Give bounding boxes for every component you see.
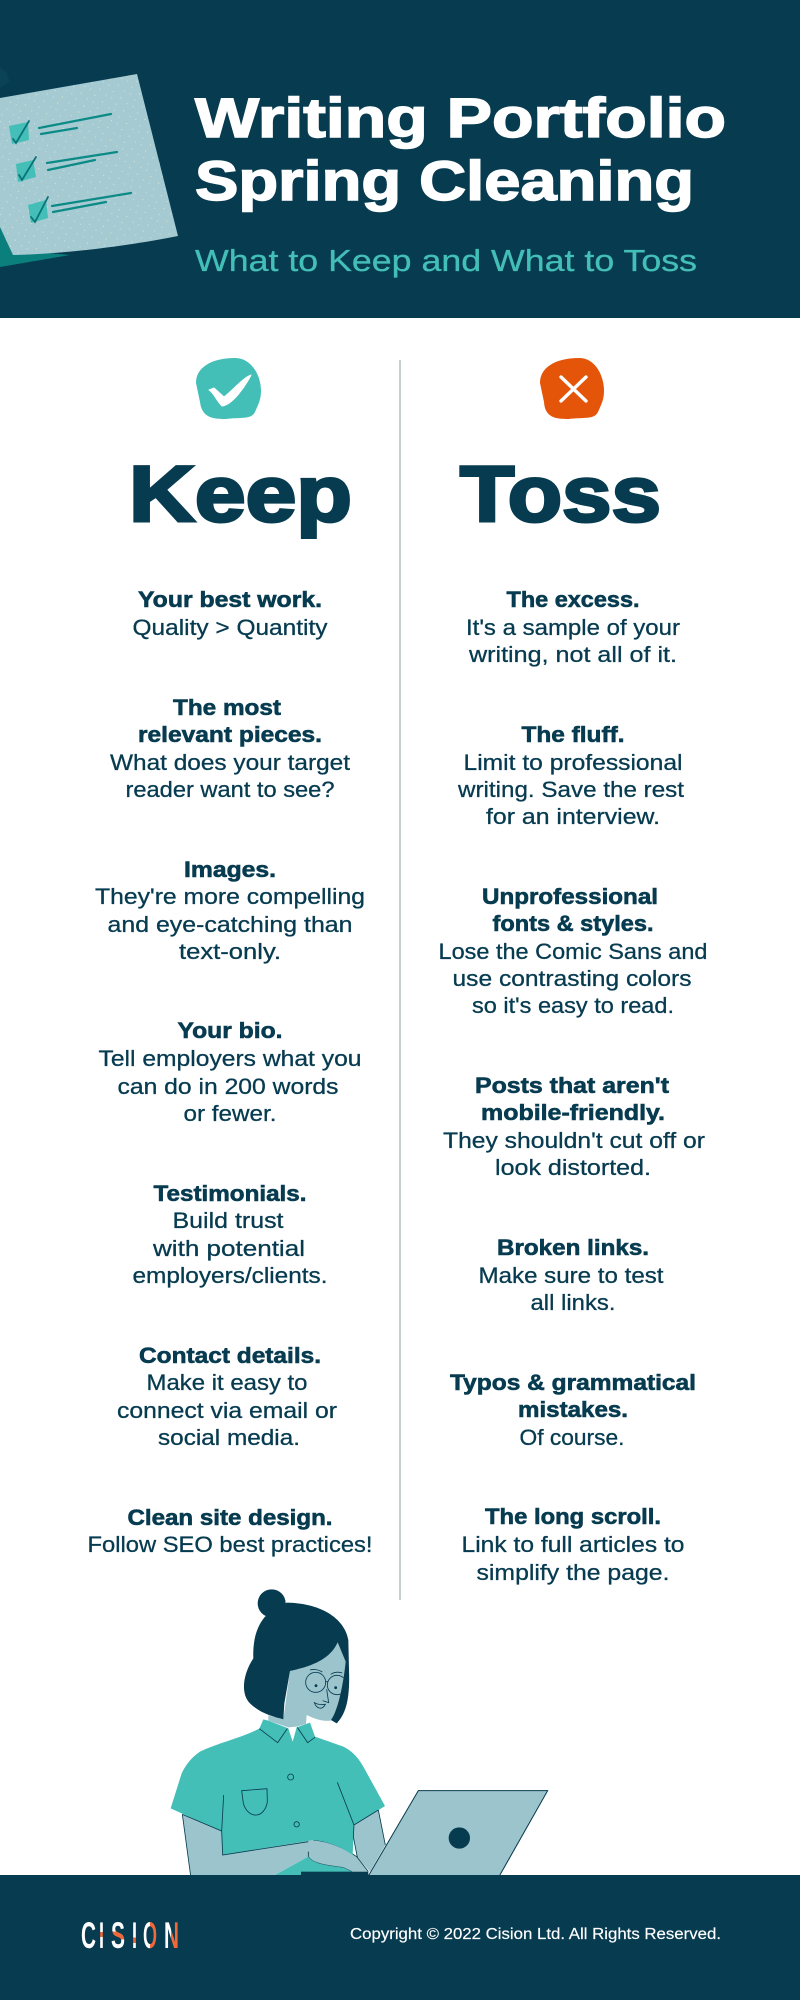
keep item: relevant pieces: The most	[173, 695, 282, 720]
logo: N	[164, 1915, 179, 1956]
keep item: testimonials	[132, 1181, 328, 1288]
logo: I	[99, 1915, 104, 1956]
keep item: site design: Follow SEO best practices!	[88, 1532, 372, 1557]
keep item: contact details: Make it easy to	[146, 1370, 308, 1395]
keep item: bio	[98, 1018, 362, 1126]
keep item: images: text-only.	[179, 939, 281, 964]
keep item: testimonials: Build trust	[172, 1208, 284, 1233]
toss item: typos: mistakes.	[518, 1397, 628, 1422]
toss item: excess: The excess.	[506, 587, 640, 612]
keep item: images: and eye-catching than	[108, 912, 352, 937]
keep item: bio: Tell employers what you	[98, 1046, 362, 1071]
toss item: fluff: The fluff.	[522, 722, 624, 747]
toss item: typos: Of course.	[520, 1425, 624, 1450]
toss item: long scroll: The long scroll.	[485, 1504, 661, 1529]
header banner	[0, 0, 800, 318]
toss item: excess: writing, not all of it.	[468, 642, 677, 667]
toss item: fonts and styles: Unprofessional	[482, 884, 658, 909]
keep item: contact details	[117, 1343, 337, 1450]
heading: Toss: Toss	[460, 449, 661, 538]
keep item: testimonials: Testimonials.	[154, 1181, 306, 1206]
toss item: fluff: writing. Save the rest	[457, 777, 684, 802]
keep item: testimonials: with potential	[152, 1236, 305, 1261]
collar and shirt seams	[259, 1727, 315, 1743]
keep item: images	[95, 857, 365, 964]
keep item: bio: can do in 200 words	[118, 1074, 338, 1099]
toss item: mobile friendly	[443, 1073, 705, 1180]
toss item: fonts and styles: so it's easy to read.	[472, 993, 674, 1018]
title: Writing Portfolio	[195, 86, 726, 149]
face details	[182, 1669, 378, 1857]
keep item: contact details: Contact details.	[139, 1343, 321, 1368]
toss item: typos: Typos & grammatical	[450, 1370, 696, 1395]
toss item: mobile friendly: They shouldn't cut off or	[443, 1128, 705, 1153]
toss item: fonts and styles	[438, 884, 708, 1018]
toss item: long scroll: simplify the page.	[476, 1560, 670, 1585]
toss item: excess: It's a sample of your	[466, 615, 680, 640]
logo: S	[111, 1915, 125, 1956]
laptop	[301, 1791, 548, 1877]
title: Spring Cleaning	[195, 149, 694, 212]
keep item: relevant pieces: reader want to see?	[126, 777, 334, 802]
keep item: bio: or fewer.	[184, 1101, 276, 1126]
icon: checklist paper	[0, 67, 178, 267]
title	[195, 86, 726, 212]
keep item: relevant pieces	[110, 695, 350, 802]
toss item: broken links: all links.	[530, 1290, 616, 1315]
arms	[182, 1810, 385, 1876]
logo	[81, 1915, 179, 1956]
toss item: long scroll	[462, 1504, 684, 1585]
keep item: site design: Clean site design.	[128, 1505, 332, 1530]
hair	[244, 1589, 349, 1723]
keep item: best work	[132, 587, 328, 640]
subtitle: What to Keep and What to Toss	[195, 243, 697, 278]
toss item: fluff: Limit to professional	[464, 750, 682, 775]
keep item: relevant pieces: What does your target	[110, 750, 350, 775]
heading: Keep: Keep	[129, 449, 352, 538]
toss item: fonts and styles: use contrasting colors	[452, 966, 692, 991]
toss item: typos	[450, 1370, 696, 1450]
toss item: mobile friendly: Posts that aren't	[475, 1073, 670, 1098]
keep item: contact details: social media.	[158, 1425, 300, 1450]
toss item: broken links	[478, 1235, 664, 1315]
icon: toss x badge	[540, 358, 604, 419]
keep item: images: They're more compelling	[95, 884, 365, 909]
keep item: bio: Your bio.	[178, 1018, 282, 1043]
keep item: best work: Your best work.	[138, 587, 322, 612]
logo: C	[81, 1915, 96, 1956]
center divider	[399, 360, 401, 1600]
illustration: woman at laptop	[171, 1589, 548, 1877]
icon: keep check badge	[196, 358, 261, 419]
keep item: site design	[88, 1505, 372, 1557]
toss item: long scroll: Link to full articles to	[462, 1532, 684, 1557]
neck and face	[268, 1642, 346, 1727]
logo: I	[132, 1915, 137, 1956]
keep item: testimonials: employers/clients.	[132, 1263, 328, 1288]
toss item: mobile friendly: mobile-friendly.	[481, 1100, 665, 1125]
toss item: mobile friendly: look distorted.	[495, 1155, 651, 1180]
copyright: Copyright © 2022 Cision Ltd. All Rights Reserved.	[350, 1926, 721, 1943]
toss item: excess	[466, 587, 680, 667]
toss item: fluff	[457, 722, 684, 829]
toss item: fluff: for an interview.	[486, 804, 660, 829]
keep item: best work: Quality > Quantity	[132, 615, 328, 640]
keep item: images: Images.	[184, 857, 276, 882]
footer	[0, 1875, 800, 2000]
shirt	[171, 1719, 385, 1855]
keep item: contact details: connect via email or	[117, 1398, 337, 1423]
toss item: broken links: Broken links.	[497, 1235, 649, 1260]
toss item: fonts and styles: fonts & styles.	[492, 911, 654, 936]
toss item: fonts and styles: Lose the Comic Sans and	[438, 939, 708, 964]
keep item: relevant pieces: relevant pieces.	[138, 722, 322, 747]
toss item: broken links: Make sure to test	[478, 1263, 664, 1288]
logo: O	[143, 1915, 157, 1956]
